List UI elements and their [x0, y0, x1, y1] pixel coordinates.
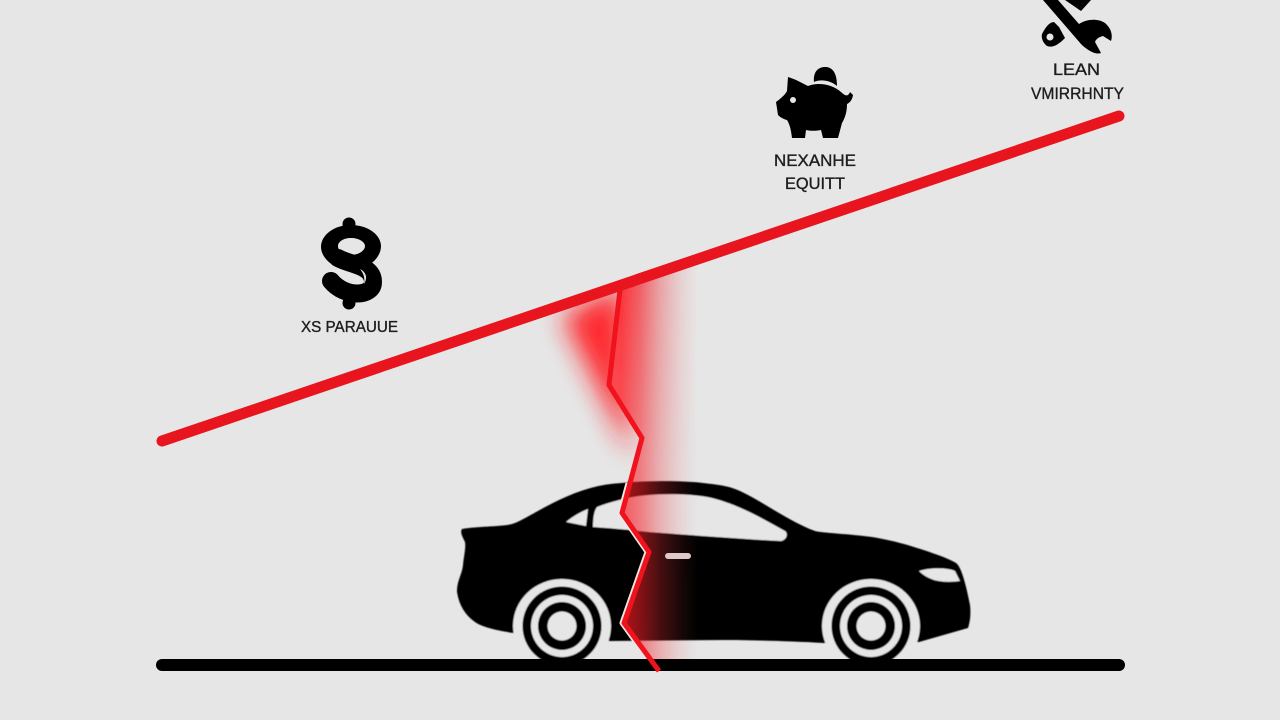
dollar stem bottom	[342, 296, 356, 310]
label: lean: LEAN	[1053, 61, 1100, 79]
headlight	[919, 568, 960, 582]
red glow right of crack	[612, 268, 692, 659]
label: dollar: XS PARAUUE	[301, 319, 398, 336]
screwdriver handle	[1042, 22, 1065, 47]
icon: crossed wrench and screwdriver	[1042, 0, 1112, 54]
dollar upper loop	[321, 225, 381, 270]
eye	[790, 97, 796, 103]
infographic canvas	[156, 0, 1125, 672]
screwdriver tip	[1065, 0, 1091, 11]
icon: dollar sign	[321, 218, 381, 310]
coin	[814, 67, 837, 86]
door handle	[665, 553, 691, 559]
car body	[457, 481, 970, 643]
crack white halo	[620, 483, 647, 648]
ground line	[162, 659, 1119, 671]
icon: piggy bank	[776, 67, 853, 138]
rear quarter window	[566, 509, 588, 526]
red glow left of crack	[562, 285, 632, 455]
rear wheel arch and wheel	[512, 578, 612, 659]
side window	[593, 494, 787, 541]
car silhouette	[457, 481, 970, 673]
dollar lower curve	[331, 258, 373, 294]
wrench	[1043, 0, 1112, 54]
label: vulnerability: VMIRRHNTY	[1031, 84, 1124, 103]
label: equity line 1: NEXANHE	[774, 152, 856, 170]
dollar stem top	[342, 218, 356, 230]
dollar inner sliver	[360, 269, 366, 284]
pig body	[776, 77, 853, 138]
front wheel arch and wheel	[821, 578, 921, 659]
label: equity line 2: EQUITT	[785, 175, 845, 193]
red crack splitting the car	[609, 290, 659, 671]
rising red line	[162, 116, 1119, 441]
